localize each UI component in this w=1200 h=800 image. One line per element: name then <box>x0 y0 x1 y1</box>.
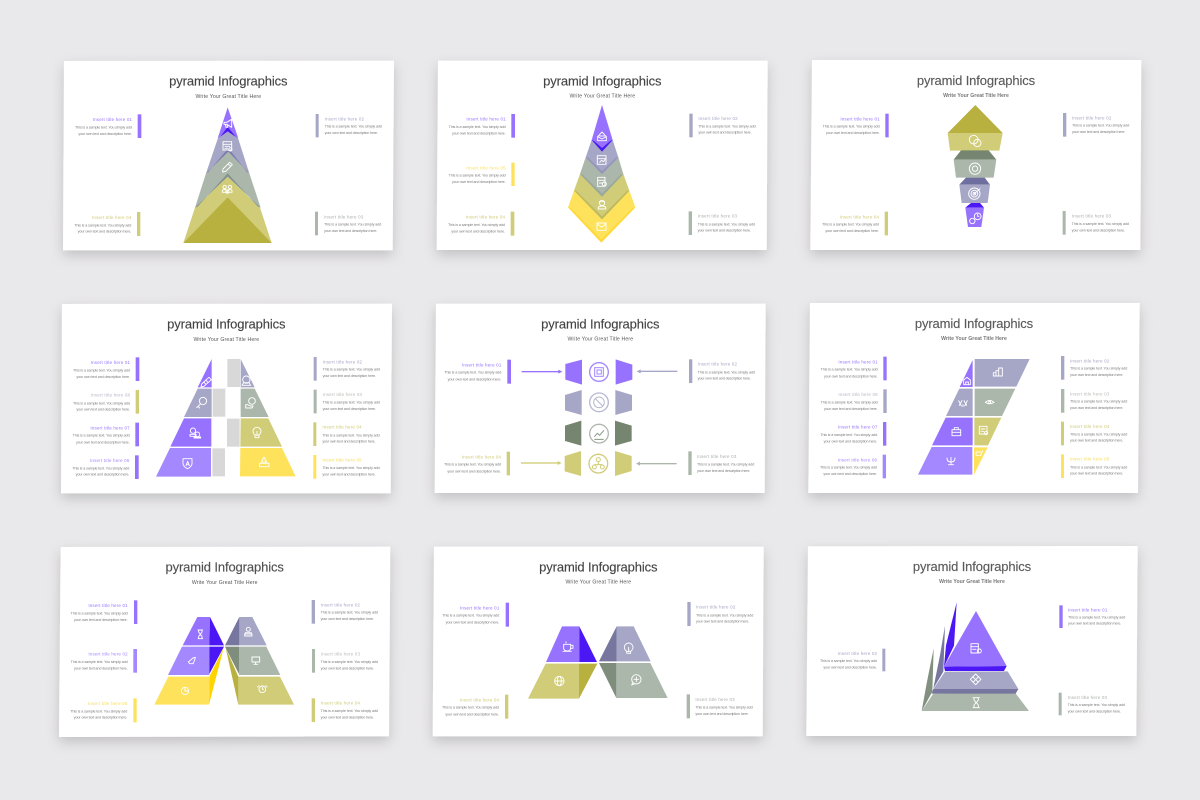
item 04: Insert title here 04 <box>460 697 499 702</box>
item 02: your own text and description here. <box>325 131 378 135</box>
item 04: Insert title here 04 <box>92 215 132 220</box>
item 01: Insert title here 01 <box>838 359 878 364</box>
item 01: your own text and description here. <box>448 377 501 381</box>
subtitle: Write Your Great Title Here <box>193 337 259 343</box>
icon: alarm <box>258 686 267 693</box>
item 02 <box>687 602 753 626</box>
icon: hand coin <box>246 398 255 408</box>
icon: bulb <box>253 427 261 438</box>
item 03: your own text and description here. <box>321 666 374 670</box>
icon: hands <box>959 401 967 407</box>
item 03: Insert title here 03 <box>698 214 737 219</box>
icon: chat <box>632 675 641 685</box>
item 06 <box>820 455 886 478</box>
icon: target <box>969 188 980 199</box>
item 02: This is a sample text. You simply add <box>698 370 755 374</box>
icon: people <box>222 185 232 193</box>
item 04: Insert title here 04 <box>466 215 505 220</box>
icon: person desk <box>245 627 252 636</box>
item 01: Insert title here 01 <box>462 362 502 367</box>
item 01: This is a sample text. You simply add <box>449 125 506 129</box>
item 01 <box>1059 605 1125 628</box>
item 02: Insert title here 02 <box>325 116 364 121</box>
item 03: your own text and description here. <box>695 712 749 716</box>
item 05: Insert title here 05 <box>88 701 128 706</box>
panel: slide 1 stacked chevron pyramid <box>63 61 394 250</box>
icon: board <box>252 657 260 664</box>
item 02: This is a sample text. You simply add <box>323 368 380 372</box>
icon: briefcase <box>952 428 961 436</box>
item 04: Insert title here 04 <box>840 214 879 219</box>
item 01 <box>823 114 889 137</box>
item 05: Insert title here 05 <box>1070 457 1110 462</box>
item 04: This is a sample text. You simply add <box>444 463 501 467</box>
item 02 <box>1063 113 1129 137</box>
item 03 <box>1061 389 1127 413</box>
item 03: your own text and description here. <box>1068 709 1121 713</box>
icon: cup <box>563 642 573 651</box>
icon: cycle <box>969 163 981 174</box>
row 1 trapezoids and icon <box>565 359 632 385</box>
item 03: This is a sample text. You simply add <box>323 401 380 405</box>
arrow: top right <box>637 369 677 373</box>
item 02: This is a sample text. You simply add <box>696 613 753 617</box>
subtitle: Write Your Great Title Here <box>943 93 1009 99</box>
item 05 <box>70 698 137 722</box>
item 05: your own text and description here. <box>452 180 506 184</box>
item 04: This is a sample text. You simply add <box>822 223 879 227</box>
item 06: your own text and description here. <box>823 472 877 476</box>
panel: slide 6 slanted pyramid <box>808 303 1140 493</box>
item 03: Insert title here 03 <box>695 697 735 702</box>
item 04: your own text and description here. <box>1070 439 1123 443</box>
item 04: Insert title here 04 <box>322 425 362 430</box>
item 02: your own text and description here. <box>698 377 751 381</box>
title: pyramid Infographics <box>539 559 658 574</box>
item 01: This is a sample text. You simply add <box>823 125 880 129</box>
item 04 <box>1061 422 1127 445</box>
item 03: your own text and description here. <box>697 469 750 473</box>
item 01: your own text and description here. <box>1068 622 1121 626</box>
arrow: top left <box>522 370 562 374</box>
item 01: This is a sample text. You simply add <box>75 125 132 129</box>
item 01: This is a sample text. You simply add <box>821 368 878 372</box>
item 05: This is a sample text. You simply add <box>70 709 127 713</box>
item 08: Insert title here 08 <box>838 392 878 397</box>
pyramid chart <box>918 359 1030 475</box>
item 03 <box>1063 211 1129 235</box>
item 02: your own text and description here. <box>1072 130 1125 134</box>
subtitle: Write Your Great Title Here <box>939 579 1005 585</box>
item 04: This is a sample text. You simply add <box>442 706 499 710</box>
pyramid chart <box>156 359 296 477</box>
item 02: Insert title here 02 <box>1072 115 1112 120</box>
item 03 <box>687 694 753 718</box>
item 01: your own text and description here. <box>452 132 506 136</box>
item 02: This is a sample text. You simply add <box>325 125 382 129</box>
item 03: Insert title here 03 <box>1070 391 1110 396</box>
item 07: Insert title here 07 <box>90 425 130 430</box>
panel: slide 5 circles with arrows <box>435 304 766 493</box>
panel: slide 7 twin pyramids three tiers <box>59 547 390 737</box>
icon: tag <box>976 451 983 455</box>
pyramid chart <box>528 626 668 699</box>
item 02 <box>71 649 137 673</box>
icon: pencil <box>223 162 232 172</box>
item 02 <box>314 357 380 381</box>
item 01 <box>71 600 137 624</box>
icon: knot diamond <box>970 674 981 685</box>
item 01 <box>73 357 139 381</box>
icon: bulb <box>624 643 633 653</box>
item 07: This is a sample text. You simply add <box>73 434 130 438</box>
item 02 right: Insert title here 02 <box>321 602 360 607</box>
item 01: Insert title here 01 <box>460 605 500 610</box>
item 03 <box>1059 693 1125 715</box>
icon: calendar <box>223 142 232 151</box>
item 02: This is a sample text. You simply add <box>1070 367 1127 371</box>
item 02: Insert title here 02 <box>696 605 736 610</box>
icon: eye <box>985 400 994 404</box>
arrow: bottom left <box>521 461 562 465</box>
item 03: your own text and description here. <box>698 229 751 233</box>
item 02: your own text and description here. <box>323 374 376 378</box>
item 05: Insert title here 05 <box>322 457 362 462</box>
item 04: Insert title here 04 <box>462 454 501 459</box>
row 3 trapezoids and chart icon <box>565 421 632 446</box>
item 06: This is a sample text. You simply add <box>72 466 129 470</box>
item 04: Insert title here 04 <box>321 701 360 706</box>
item 04: your own text and description here. <box>447 469 501 473</box>
item 02: Insert title here 02 <box>323 359 362 364</box>
icon: document <box>971 644 981 653</box>
item 03: your own text and description here. <box>324 229 377 233</box>
item 05: your own text and description here. <box>322 472 376 476</box>
item 04: your own text and description here. <box>321 715 374 719</box>
icon: hand <box>188 657 195 664</box>
item 03: Insert title here 03 <box>321 652 360 657</box>
item 02 right: your own text and description here. <box>321 617 374 621</box>
item 02: This is a sample text. You simply add <box>1072 124 1129 128</box>
item 02 right <box>312 600 378 624</box>
item 04 <box>313 422 380 446</box>
subtitle: Write Your Great Title Here <box>565 580 631 586</box>
item 08: This is a sample text. You simply add <box>821 401 878 405</box>
panel: slide 2 diamond pyramid <box>437 61 768 250</box>
item 03: This is a sample text. You simply add <box>321 660 378 664</box>
item 06 <box>72 455 139 479</box>
icon: person <box>598 200 606 209</box>
title: pyramid Infographics <box>915 316 1034 331</box>
item 03 <box>689 211 755 235</box>
icon: building <box>964 377 970 385</box>
icon: hourglass <box>973 698 979 708</box>
item 01: This is a sample text. You simply add <box>444 370 501 374</box>
item 01: Insert title here 01 <box>466 117 506 122</box>
icon: plants <box>947 457 955 465</box>
item 03: your own text and description here. <box>1072 228 1125 232</box>
item 04: This is a sample text. You simply add <box>322 433 380 437</box>
item 02: This is a sample text. You simply add <box>820 659 877 663</box>
item 03: This is a sample text. You simply add <box>698 222 755 226</box>
item 07 <box>820 422 886 446</box>
item 03: your own text and description here. <box>1070 406 1123 410</box>
item 07 <box>73 423 139 446</box>
item 05: This is a sample text. You simply add <box>449 174 506 178</box>
title: pyramid Infographics <box>165 560 284 575</box>
item 04 <box>448 212 514 236</box>
icon: pencil <box>201 377 211 387</box>
item 01: Insert title here 01 <box>91 360 130 365</box>
title: pyramid Infographics <box>913 559 1032 574</box>
item 02: Insert title here 02 <box>88 652 128 657</box>
item 04 <box>444 452 510 475</box>
item 01 <box>75 114 141 138</box>
panel: slide 4 split pyramid <box>61 304 392 493</box>
item 05: This is a sample text. You simply add <box>1070 465 1127 469</box>
row 4 trapezoids and org icon <box>565 451 632 476</box>
item 05 <box>449 163 515 186</box>
item 03: This is a sample text. You simply add <box>1072 222 1129 226</box>
item 03: Insert title here 03 <box>697 454 737 459</box>
item 03 <box>315 212 381 235</box>
icon: pie <box>181 687 189 695</box>
item 01: Insert title here 01 <box>840 116 880 121</box>
item 01: Insert title here 01 <box>88 603 128 608</box>
item 02 right: This is a sample text. You simply add <box>321 611 378 615</box>
item 01: your own text and description here. <box>826 131 880 135</box>
item 03: This is a sample text. You simply add <box>697 462 754 466</box>
icon: hourglass <box>198 630 203 639</box>
item 01: your own text and description here. <box>78 132 132 136</box>
row 2 trapezoids and icon <box>565 390 632 415</box>
item 02 <box>1061 356 1127 380</box>
subtitle: Write Your Great Title Here <box>192 580 258 586</box>
item 04: This is a sample text. You simply add <box>74 223 131 227</box>
item 01: Insert title here 01 <box>1068 607 1108 612</box>
item 02 <box>689 359 755 383</box>
item 02: Insert title here 02 <box>698 362 737 367</box>
icon: shield <box>183 459 192 469</box>
icon: bars <box>993 368 1002 376</box>
item 02 <box>820 649 885 671</box>
item 01 <box>444 360 511 384</box>
item 04: your own text and description here. <box>825 229 879 233</box>
item 01: your own text and description here. <box>74 618 128 622</box>
item 01 <box>821 357 887 380</box>
item 02: your own text and description here. <box>823 665 877 669</box>
item 02: Insert title here 02 <box>698 116 738 121</box>
icon: box <box>598 132 606 141</box>
item 01: your own text and description here. <box>76 375 130 379</box>
item 02: your own text and description here. <box>696 620 749 624</box>
icon: gears <box>970 213 981 224</box>
icon: envelope <box>597 223 606 230</box>
item 05: Insert title here 05 <box>466 165 506 170</box>
item 01: This is a sample text. You simply add <box>73 368 130 372</box>
pyramid chart <box>948 105 1003 227</box>
title: pyramid Infographics <box>169 74 288 89</box>
pyramid chart <box>183 107 272 243</box>
item 08 <box>821 389 887 413</box>
item 06: This is a sample text. You simply add <box>820 466 877 470</box>
item 03: Insert title here 03 <box>324 214 364 219</box>
icon: pyramid stack <box>260 457 269 467</box>
item 01: your own text and description here. <box>446 620 499 624</box>
item 05 <box>313 455 380 479</box>
item 08: This is a sample text. You simply add <box>73 401 130 405</box>
item 02: Insert title here 02 <box>838 651 877 656</box>
item 04: your own text and description here. <box>445 712 499 716</box>
title: pyramid Infographics <box>541 316 660 331</box>
pyramid chart <box>568 105 635 243</box>
item 03 <box>688 451 754 475</box>
item 06: Insert title here 06 <box>90 458 130 463</box>
item 08: your own text and description here. <box>76 408 130 412</box>
item 08 <box>73 390 139 414</box>
item 07: your own text and description here. <box>824 440 877 444</box>
item 03: your own text and description here. <box>323 407 376 411</box>
item 04 <box>74 212 140 236</box>
icon: megaphone <box>224 119 232 127</box>
icon: globe <box>555 676 564 686</box>
item 01: This is a sample text. You simply add <box>442 614 499 618</box>
icon: key <box>197 397 207 408</box>
item 05 <box>1061 454 1127 478</box>
item 01: This is a sample text. You simply add <box>1068 615 1125 619</box>
item 08: Insert title here 08 <box>91 393 130 398</box>
item 02: your own text and description here. <box>74 667 128 671</box>
item 07: Insert title here 07 <box>838 425 878 430</box>
item 02 <box>316 114 382 137</box>
item 04 <box>442 695 508 719</box>
item 07: your own text and description here. <box>76 440 130 444</box>
item 01 <box>449 114 515 138</box>
title: pyramid Infographics <box>917 73 1036 88</box>
item 02: This is a sample text. You simply add <box>71 660 128 664</box>
item 01: Insert title here 01 <box>93 117 132 122</box>
item 02: your own text and description here. <box>1070 373 1123 377</box>
panel: slide 8 twin pyramids two tiers <box>433 547 764 736</box>
item 05: This is a sample text. You simply add <box>322 466 380 470</box>
item 03: Insert title here 03 <box>1068 695 1107 700</box>
item 01: your own text and description here. <box>824 374 878 378</box>
item 03: Insert title here 03 <box>1072 213 1111 218</box>
pyramid chart <box>922 602 1029 711</box>
item 04: your own text and description here. <box>451 229 505 233</box>
panel: slide 9 exploded 3D pyramid <box>806 546 1138 736</box>
icon: document <box>979 426 988 435</box>
item 08: your own text and description here. <box>824 407 878 411</box>
item 03: This is a sample text. You simply add <box>1070 400 1127 404</box>
icon: document circle <box>598 177 606 186</box>
item 01: This is a sample text. You simply add <box>71 611 128 615</box>
item 02: Insert title here 02 <box>1070 358 1110 363</box>
item 02: your own text and description here. <box>698 131 752 135</box>
item 05: your own text and description here. <box>74 716 127 720</box>
panel: slide 3 separated tiers <box>810 60 1141 250</box>
item 03: Insert title here 03 <box>323 392 362 397</box>
icon: coins <box>969 135 981 147</box>
title: pyramid Infographics <box>543 73 662 88</box>
item 04 <box>312 698 378 722</box>
item 01 <box>442 603 509 627</box>
item 07: This is a sample text. You simply add <box>820 433 877 437</box>
item 02: This is a sample text. You simply add <box>698 124 756 128</box>
item 03 <box>314 390 380 413</box>
title: pyramid Infographics <box>167 317 286 332</box>
item 03: This is a sample text. You simply add <box>695 706 753 710</box>
arrow: bottom right <box>636 462 677 466</box>
item 02 <box>689 114 756 137</box>
item 04 <box>822 212 888 235</box>
subtitle: Write Your Great Title Here <box>569 94 635 100</box>
item 05: your own text and description here. <box>1070 472 1123 476</box>
item 03 <box>312 649 378 673</box>
item 04: your own text and description here. <box>78 230 131 234</box>
item 06: your own text and description here. <box>76 473 129 477</box>
item 03: This is a sample text. You simply add <box>324 223 381 227</box>
item 04: This is a sample text. You simply add <box>448 223 505 227</box>
item 04: This is a sample text. You simply add <box>321 709 378 713</box>
pyramid chart <box>154 617 294 705</box>
subtitle: Write Your Great Title Here <box>567 337 633 343</box>
icon: people <box>190 428 201 438</box>
icon: person badge <box>242 376 251 385</box>
item 06: Insert title here 06 <box>838 457 877 462</box>
subtitle: Write Your Great Title Here <box>195 94 261 100</box>
item 04: your own text and description here. <box>322 440 376 444</box>
item 03: This is a sample text. You simply add <box>1068 703 1125 707</box>
icon: document chart <box>597 156 606 164</box>
subtitle: Write Your Great Title Here <box>941 336 1007 342</box>
item 04: This is a sample text. You simply add <box>1070 432 1127 436</box>
item 04: Insert title here 04 <box>1070 424 1110 429</box>
